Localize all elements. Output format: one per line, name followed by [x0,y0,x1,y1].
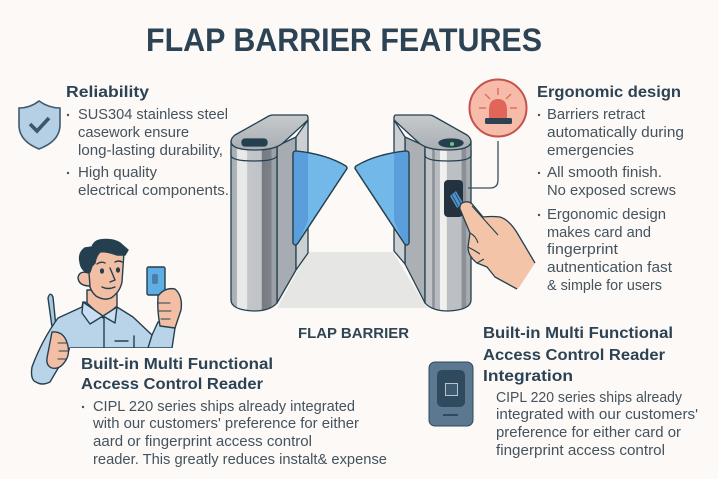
card [147,267,165,295]
reliability bullet list: long-lasting durability, [78,143,223,159]
ergonomic bullet list: automatically during [547,125,684,141]
ear [78,272,90,286]
ergonomic bullet list: Ergonomic design [547,207,666,223]
reader body text, right: fingerprint access control [496,443,665,459]
title: FLAP BARRIER FEATURES [146,22,542,58]
neck and face [87,290,117,318]
heading: reader integration, right [483,325,673,385]
floor shadow [277,252,427,308]
ergonomic bullet list: emergencies [547,143,634,159]
reliability bullet list: electrical components. [78,183,229,199]
icon: hand presenting card [460,202,535,289]
panel: reliability [66,84,229,199]
heading: ergonomic design: Ergonomic design [537,84,681,101]
hand holding card [158,289,181,328]
reader body text, right: integrated with our customers' [496,407,698,423]
heading: built-in reader, left: Access Control Reader [81,376,263,393]
reader body text, left: CIPL 220 series ships already integrated [93,399,355,415]
reader body text, left: with our customers' preference for either [92,416,359,432]
illustration label: FLAP BARRIER [298,326,410,342]
hair [80,239,128,273]
illustration: right flap [355,151,409,245]
illustration: left flap [293,151,347,245]
icon: emergency alarm [470,80,526,136]
ergonomic bullet list: Barriers retract [547,107,645,123]
reliability bullet list: SUS304 stainless steel [78,107,228,123]
hand with screwdriver [47,332,69,368]
ergonomic bullet list: All smooth finish. [547,165,662,181]
panel: built-in reader, left [81,356,387,468]
heading: reader integration, right: Integration [483,368,573,385]
reliability bullet list: High quality [78,165,158,181]
reader body text, left: reader. This greatly reduces instalt& expense [93,452,387,468]
text mask below technician [70,348,410,351]
connector line: alarm to reader [468,141,498,188]
reader body text, left [82,399,387,468]
reliability bullet list [67,107,229,199]
panel: built-in reader integration, right [483,325,698,459]
icon: card reader on post [444,180,463,217]
heading: reader integration, right: Access Control Reader [483,347,665,364]
ergonomic bullet list: autnentication fast [547,260,672,276]
reader body text, right: CIPL 220 series ships already [496,390,683,406]
reliability bullet list: casework ensure [78,125,189,141]
icon: access control reader [429,362,473,426]
ergonomic bullet list: No exposed screws [547,183,676,199]
reader body text, right [496,390,698,459]
icon: shield with check [19,101,60,149]
heading: built-in reader, left: Built-in Multi Functional [81,356,273,373]
illustration: left barrier post [231,115,308,311]
face details [97,261,122,288]
ergonomic bullet list: fingerprint [547,242,618,258]
shirt [32,302,175,384]
collar [82,302,117,324]
reader body text, right: preference for either card or [496,425,681,441]
reader body text, left: aard or fingerprint access control [93,434,312,450]
panel: ergonomic design [537,84,684,294]
illustration: technician with screwdriver and card [32,239,181,384]
illustration: right barrier post [394,115,471,311]
heading: reader integration, right: Built-in Multi Functional [483,325,673,342]
screwdriver [48,294,61,332]
ergonomic bullet list [538,107,684,294]
ergonomic bullet list: & simple for users [547,278,662,294]
ergonomic bullet list: makes card and [547,225,651,241]
heading: reliability: Reliability [66,84,149,101]
heading: built-in reader, left [81,356,273,393]
